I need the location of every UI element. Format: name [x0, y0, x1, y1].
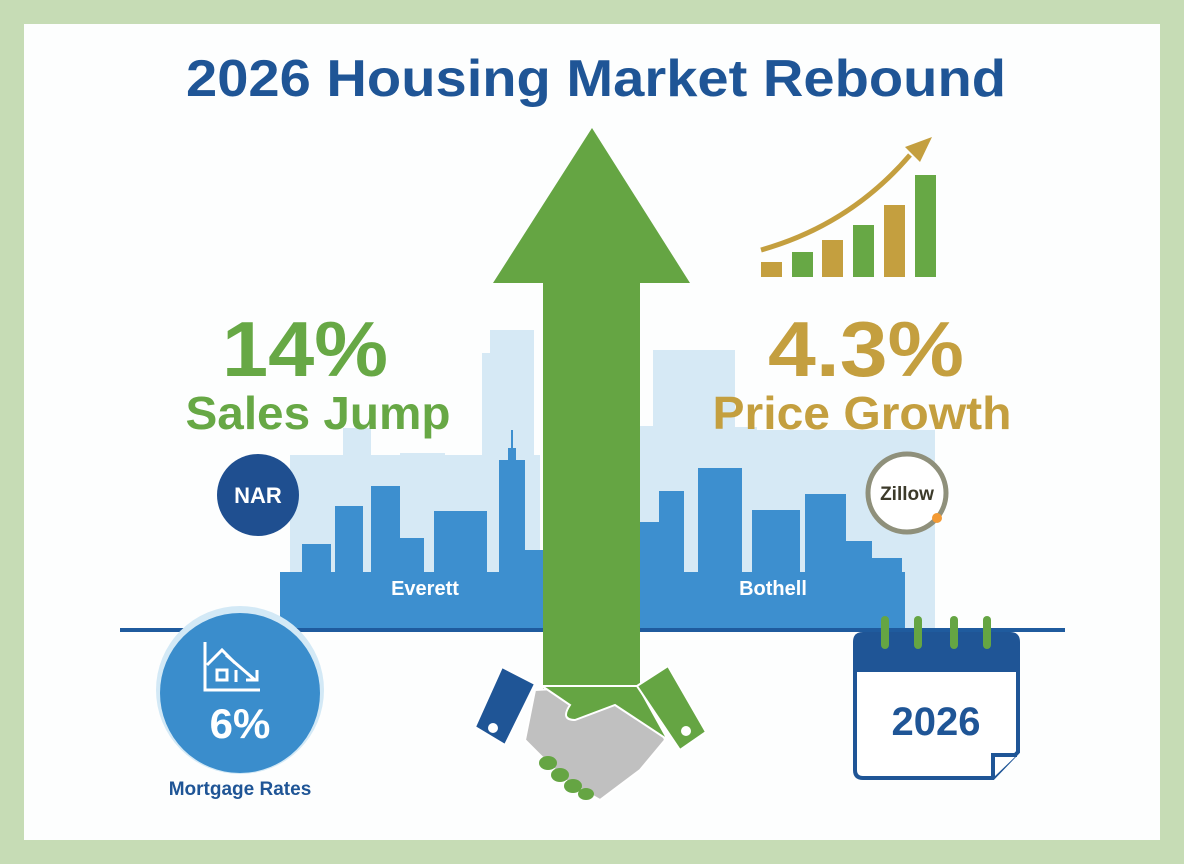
stat: 14% sales jump: [186, 305, 450, 439]
stat: 4.3% price growth: Price Growth: [712, 387, 1012, 439]
icon: calendar 2026: 2026: [892, 700, 980, 744]
label: Bothell: Bothell: [739, 578, 807, 600]
icon: bar chart growth: [761, 137, 936, 277]
stat: 4.3% price growth: [712, 305, 1012, 439]
logo: Zillow: [868, 454, 946, 532]
skyline: [280, 330, 935, 630]
stat: 4.3% price growth: 4.3%: [768, 305, 964, 393]
badge: mortgage rates 6%: 6%: [210, 700, 270, 747]
icon: handshake: [475, 666, 706, 800]
title: 2026 Housing Market Rebound: [186, 50, 1006, 108]
caption: Mortgage Rates: Mortgage Rates: [169, 779, 311, 800]
baseline: [120, 628, 1065, 632]
logo: Zillow: Zillow: [880, 484, 934, 505]
icon: calendar 2026: [855, 620, 1018, 778]
stat: 14% sales jump: 14%: [222, 305, 388, 393]
badge: mortgage rates 6%: [156, 606, 324, 800]
logo: NAR: [217, 454, 299, 536]
stat: 14% sales jump: Sales Jump: [186, 387, 450, 439]
logo: NAR: NAR: [234, 483, 282, 508]
label: Everett: Everett: [391, 578, 459, 600]
arrow: green up: [493, 128, 690, 690]
